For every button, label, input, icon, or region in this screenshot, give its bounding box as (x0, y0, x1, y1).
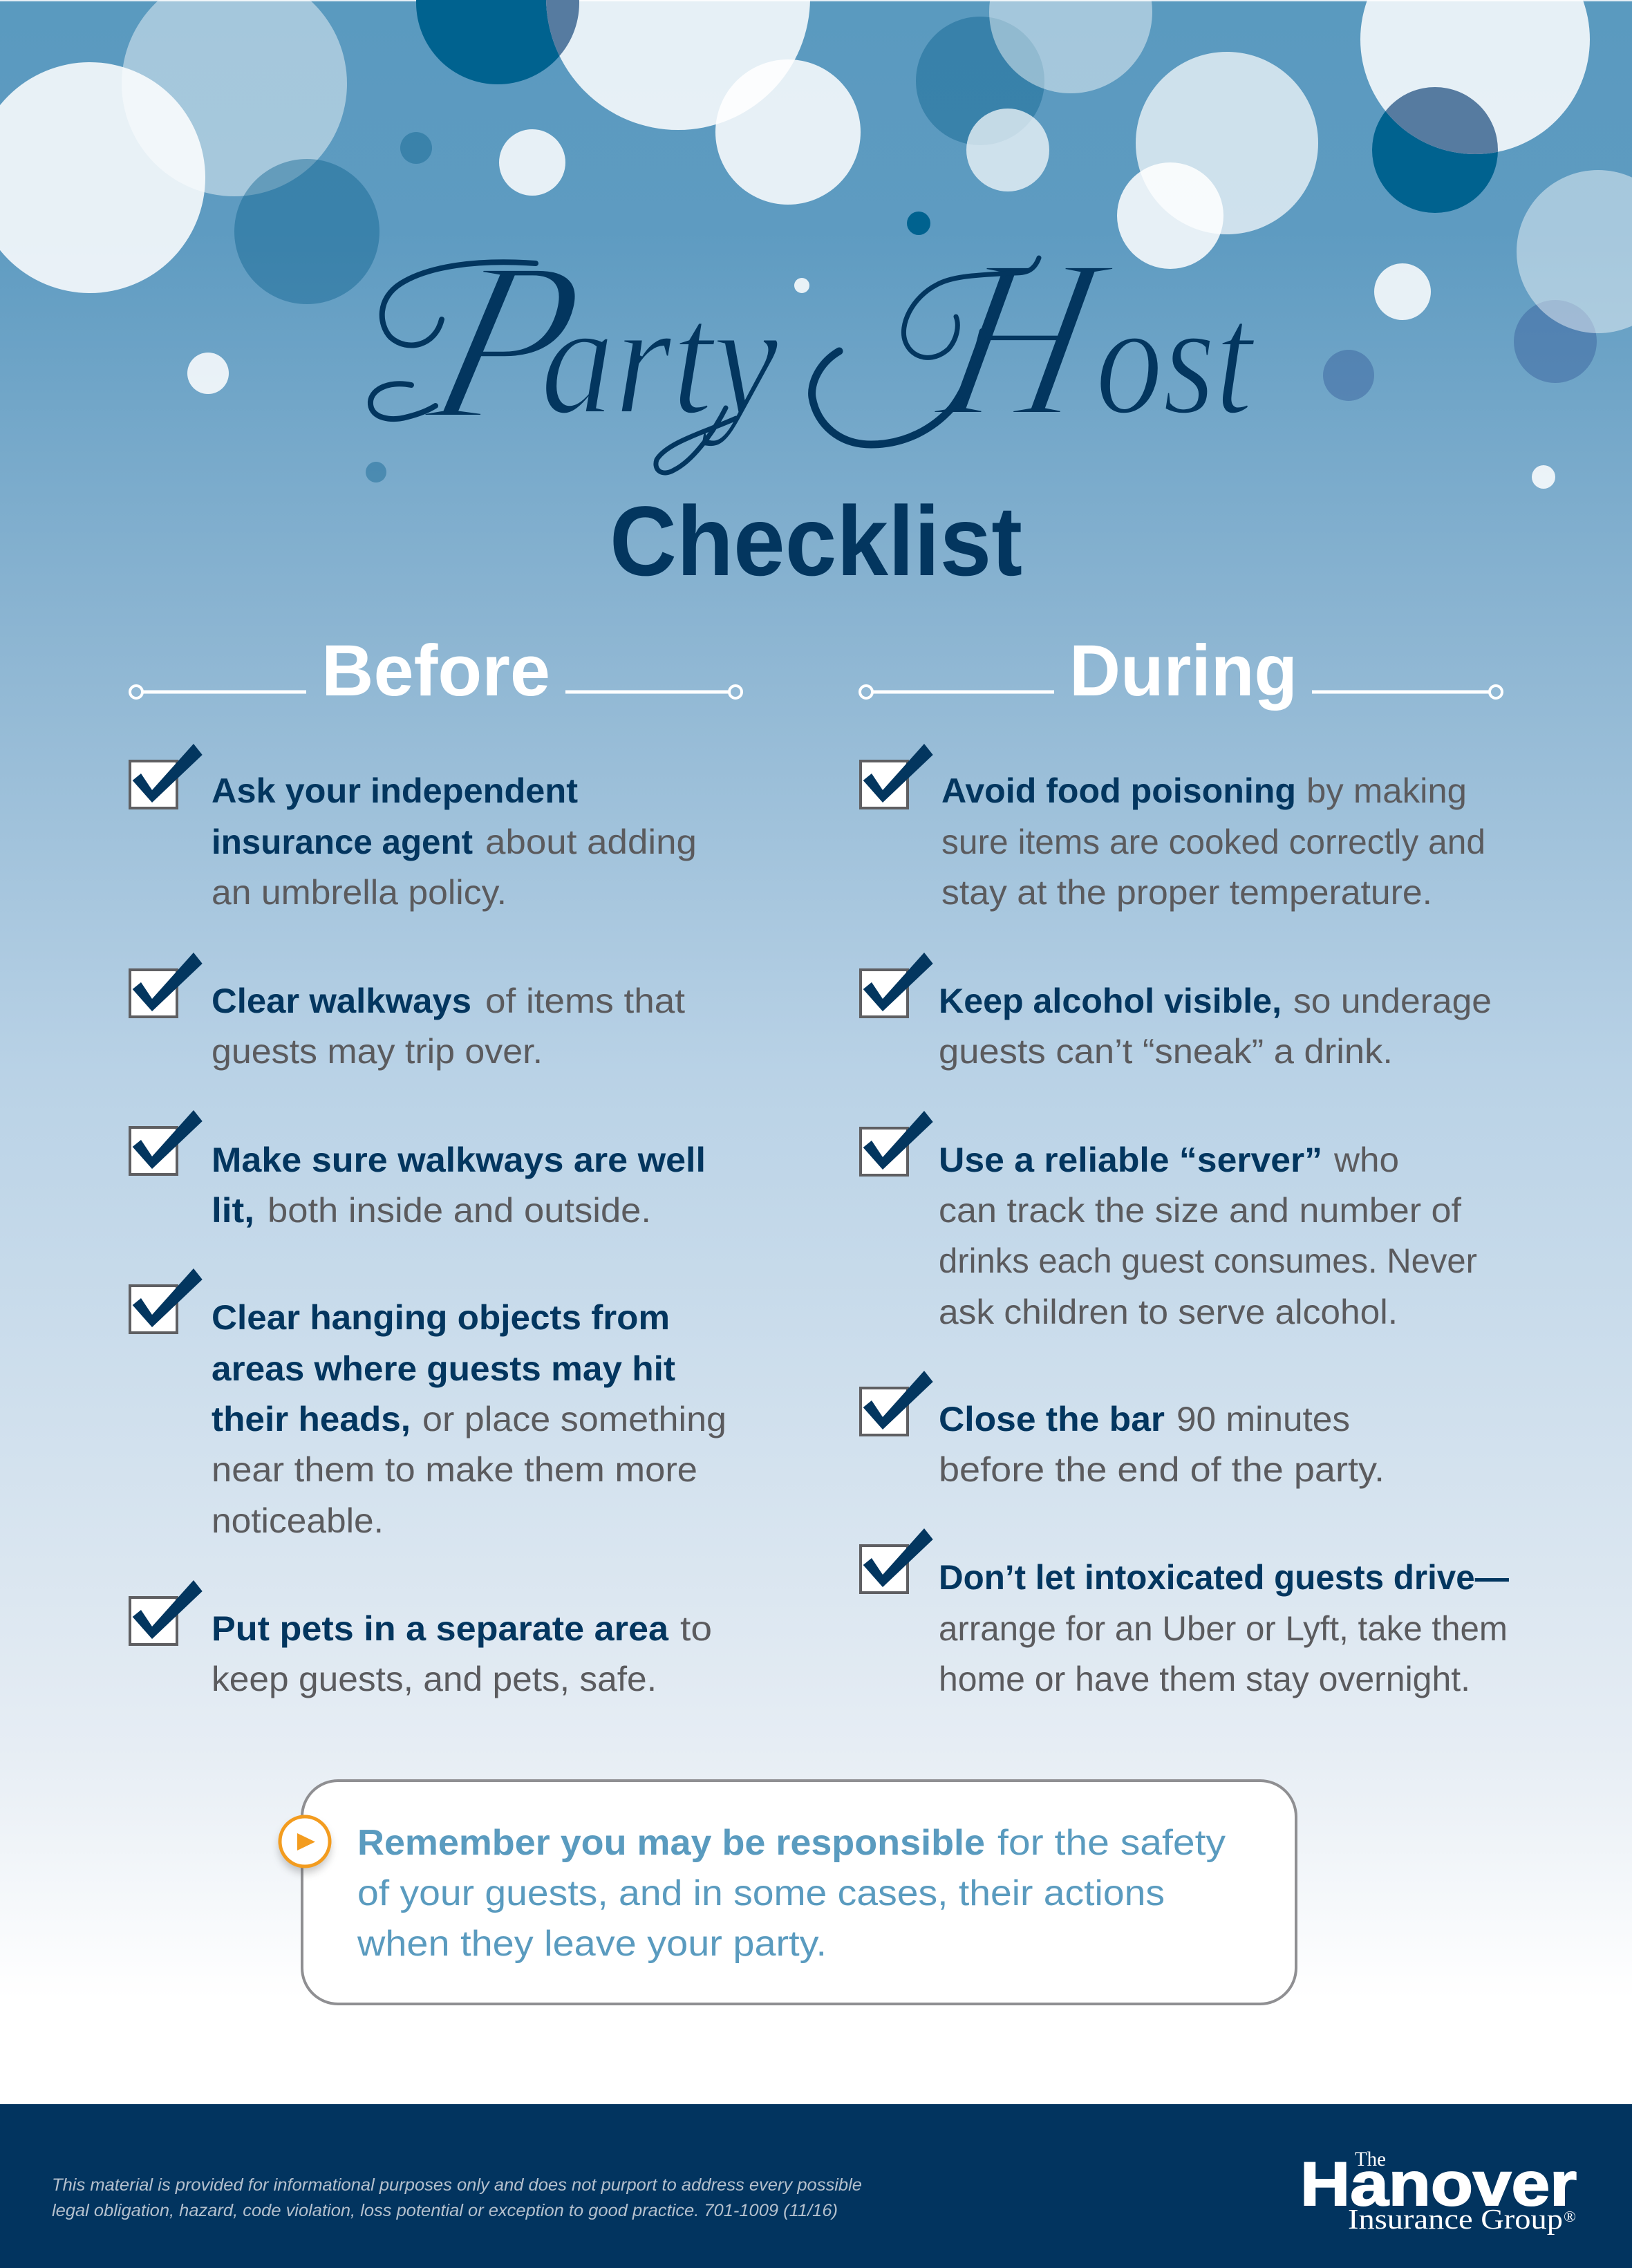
title: Checklist: Checklist (610, 487, 1022, 597)
item: intoxicated guests (861, 1528, 1509, 1698)
callout (279, 1781, 1296, 2004)
item text: noticeable. (212, 1501, 384, 1540)
title: Party Host (371, 212, 1256, 473)
title flourishes (371, 258, 1039, 473)
item: hanging objects (130, 1268, 726, 1540)
item text (941, 771, 1485, 912)
logo: The Hanover Insurance Group: ® (1564, 2208, 1576, 2225)
heading: Before: Before (321, 630, 550, 711)
item text: Close the bar (939, 1400, 1165, 1438)
item text: so underage (1293, 982, 1492, 1020)
item: food poisoning (861, 744, 1485, 912)
callout text: of your guests, and in some cases, their actions (357, 1873, 1165, 1913)
item text: both inside and outside. (268, 1191, 651, 1230)
item text: near them to make them more (212, 1450, 697, 1489)
disclaimer text: This material is provided for informational purposes only and does not purport to address every possible (52, 2175, 862, 2195)
item text (939, 1400, 1385, 1489)
item: umbrella policy (130, 744, 697, 912)
item text: lit, (212, 1191, 254, 1230)
item text: who (1333, 1141, 1399, 1179)
item: pets (130, 1580, 712, 1698)
item text: Keep alcohol visible, (939, 982, 1282, 1020)
disclaimer text (52, 2175, 862, 2220)
callout text: Remember you may be responsible (357, 1823, 985, 1863)
icon: orange play button (279, 1817, 330, 1873)
icon: checkbox (130, 744, 203, 808)
icon: checkbox (130, 953, 203, 1017)
item text (939, 1141, 1477, 1331)
icon: checkbox (130, 1580, 203, 1644)
item text (212, 1609, 712, 1698)
icon: checkbox (130, 1110, 203, 1174)
item: close the bar (861, 1371, 1385, 1489)
item text: guests may trip over. (212, 1032, 543, 1071)
title: Party Host: ost (1096, 270, 1256, 448)
item text: Avoid food poisoning (941, 771, 1296, 810)
icon: checkbox (861, 744, 933, 808)
item text: Clear walkways (212, 982, 471, 1020)
item text: about adding (485, 823, 697, 861)
item text: ask children to serve alcohol. (939, 1293, 1398, 1331)
item text: can track the size and number of (939, 1191, 1461, 1230)
icon: checkbox (861, 953, 933, 1017)
callout text: when they leave your party. (357, 1924, 827, 1964)
heading: During: During (1069, 630, 1297, 711)
title: Party Host: P (407, 215, 605, 467)
logo: The Hanover Insurance Group: The (1355, 2148, 1386, 2171)
item text: Use a reliable “server” (939, 1141, 1322, 1179)
icon: checkbox (861, 1111, 933, 1175)
heading: Before (130, 630, 742, 711)
disclaimer text: legal obligation, hazard, code violation, loss potential or exception to good practice. 701-1009 (11/16) (52, 2201, 838, 2220)
title: Party Host: H (920, 212, 1129, 465)
item text: Don’t let intoxicated guests drive— (939, 1558, 1509, 1597)
item text (939, 982, 1492, 1071)
item text: 90 minutes (1176, 1400, 1350, 1438)
item text: an umbrella policy. (212, 873, 507, 912)
item text (212, 982, 685, 1071)
icon: checkbox (861, 1371, 933, 1435)
item text (212, 1141, 706, 1230)
callout text (357, 1823, 1226, 1964)
item text (212, 771, 697, 912)
decorative bubbles (0, 0, 1632, 489)
item text: Put pets in a separate area (212, 1609, 669, 1648)
item: walkways lit (130, 1110, 706, 1230)
item text (212, 1298, 726, 1540)
callout text: for the safety (997, 1823, 1226, 1863)
item text: drinks each guest consumes. Never (939, 1241, 1477, 1280)
item text: guests can’t “sneak” a drink. (939, 1032, 1393, 1071)
item text: Make sure walkways are well (212, 1141, 706, 1179)
item text: sure items are cooked correctly and (941, 823, 1485, 861)
item text: keep guests, and pets, safe. (212, 1660, 657, 1698)
item text: their heads, (212, 1400, 411, 1438)
item text: home or have them stay overnight. (939, 1660, 1470, 1698)
item text: of items that (485, 982, 685, 1020)
item text: by making (1306, 771, 1467, 810)
item: reliable server (861, 1111, 1477, 1331)
item text: Ask your independent (212, 771, 578, 810)
item text: areas where guests may hit (212, 1349, 675, 1388)
item: clear walkways (130, 953, 685, 1071)
heading: During (860, 630, 1502, 711)
item text: before the end of the party. (939, 1450, 1385, 1489)
item text: stay at the proper temperature. (941, 873, 1432, 912)
logo: The Hanover Insurance Group: Insurance Group (1348, 2203, 1563, 2235)
panel: During checklist (861, 744, 1509, 1698)
footer band (0, 2104, 1632, 2268)
icon: checkbox (861, 1528, 933, 1593)
item text: or place something (422, 1400, 726, 1438)
item text: to (680, 1609, 712, 1648)
item text: insurance agent (212, 823, 473, 861)
item text: arrange for an Uber or Lyft, take them (939, 1609, 1508, 1648)
item: alcohol visible (861, 953, 1492, 1071)
item text: Clear hanging objects from (212, 1298, 670, 1337)
panel: Before checklist (130, 744, 726, 1698)
logo: The Hanover Insurance Group: Hanover (1300, 2149, 1577, 2218)
icon: checkbox (130, 1268, 203, 1333)
title: Party Host: arty (541, 270, 779, 448)
item text (939, 1558, 1509, 1698)
